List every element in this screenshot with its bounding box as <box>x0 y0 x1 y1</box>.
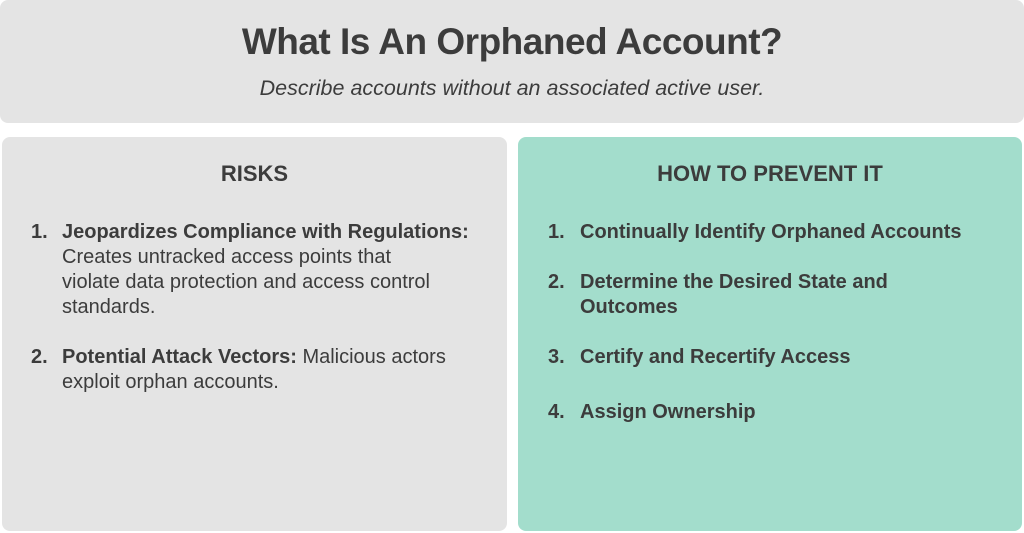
risk 1: 1. <box>31 221 48 243</box>
step 4: 4. <box>548 401 565 423</box>
risk 2: exploit orphan accounts. <box>62 371 279 393</box>
risk 1: Creates untracked access points that <box>62 246 391 268</box>
heading: risks: RISKS <box>221 161 288 186</box>
risk 2: 2. <box>31 346 48 368</box>
risk 1: Jeopardizes Compliance with Regulations: <box>62 221 469 243</box>
step 3: 3. <box>548 346 565 368</box>
risk 1 <box>31 221 469 318</box>
subtitle: Describe accounts without an associated active user. <box>260 76 764 100</box>
step 1: 1. <box>548 221 565 243</box>
step 2 <box>548 271 888 318</box>
step 2: 2. <box>548 271 565 293</box>
risk 2 <box>31 346 446 393</box>
heading: prevent: HOW TO PREVENT IT <box>657 161 883 186</box>
step 3: Certify and Recertify Access <box>580 346 850 368</box>
risk 2: Potential Attack Vectors: Malicious actors <box>62 346 446 368</box>
step 4: Assign Ownership <box>580 401 756 423</box>
risk 1: violate data protection and access control <box>62 271 430 293</box>
step 2: Determine the Desired State and <box>580 271 888 293</box>
step 1: Continually Identify Orphaned Accounts <box>580 221 962 243</box>
title: What Is An Orphaned Account? <box>242 21 782 62</box>
step 2: Outcomes <box>580 296 678 318</box>
panel: header <box>0 0 1024 123</box>
risk 1: standards. <box>62 296 155 318</box>
panel: how to prevent <box>518 137 1022 531</box>
panel: risks <box>2 137 507 531</box>
